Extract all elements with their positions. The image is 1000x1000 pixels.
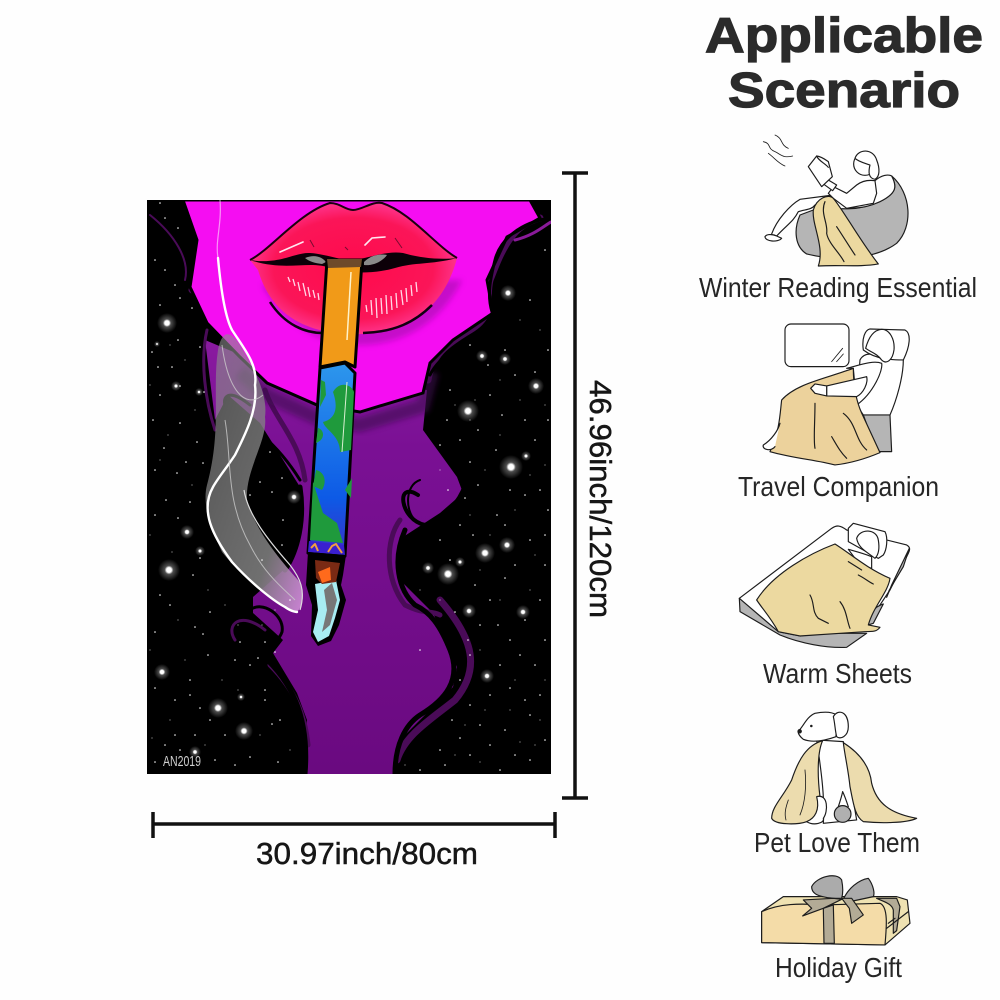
title: Applicable <box>705 9 983 63</box>
bright glowing stars <box>154 285 544 758</box>
purple neck and chest <box>205 340 463 774</box>
width label: 30.97inch/80cm <box>256 836 478 871</box>
earth paper <box>308 363 355 556</box>
black hair curls <box>224 395 465 774</box>
lip highlights <box>280 237 385 252</box>
cigarette filter <box>320 260 362 367</box>
dark hair shadow strokes <box>150 205 540 760</box>
magenta face <box>183 200 540 412</box>
width dimension line <box>153 812 555 838</box>
title <box>705 9 983 118</box>
mouth opening <box>250 252 457 272</box>
scenario: pet icon <box>772 712 917 824</box>
rolled cigarette <box>306 259 362 646</box>
fine star dust <box>150 320 545 765</box>
artist signature: AN2019 <box>163 753 201 770</box>
stars <box>152 203 548 770</box>
label: travel: Travel Companion <box>738 471 939 502</box>
right hair curl over face <box>430 218 551 375</box>
scenario: gift icon <box>762 876 910 945</box>
lips <box>250 203 462 345</box>
smoke <box>206 200 303 612</box>
scenario: winter reading icon <box>763 135 908 266</box>
height label: 46.96inch/120cm <box>583 380 618 618</box>
burnt ash tip <box>306 552 346 646</box>
height dimension line <box>562 173 588 798</box>
label: gift: Holiday Gift <box>775 952 902 983</box>
label: pet: Pet Love Them <box>754 827 920 858</box>
label: warm sheets: Warm Sheets <box>763 658 912 689</box>
scenario: warm sheets icon <box>739 523 910 647</box>
scenario: travel icon <box>763 324 909 465</box>
title: Scenario <box>728 64 960 118</box>
poster artwork <box>147 200 551 774</box>
shadow under chin <box>240 372 432 425</box>
